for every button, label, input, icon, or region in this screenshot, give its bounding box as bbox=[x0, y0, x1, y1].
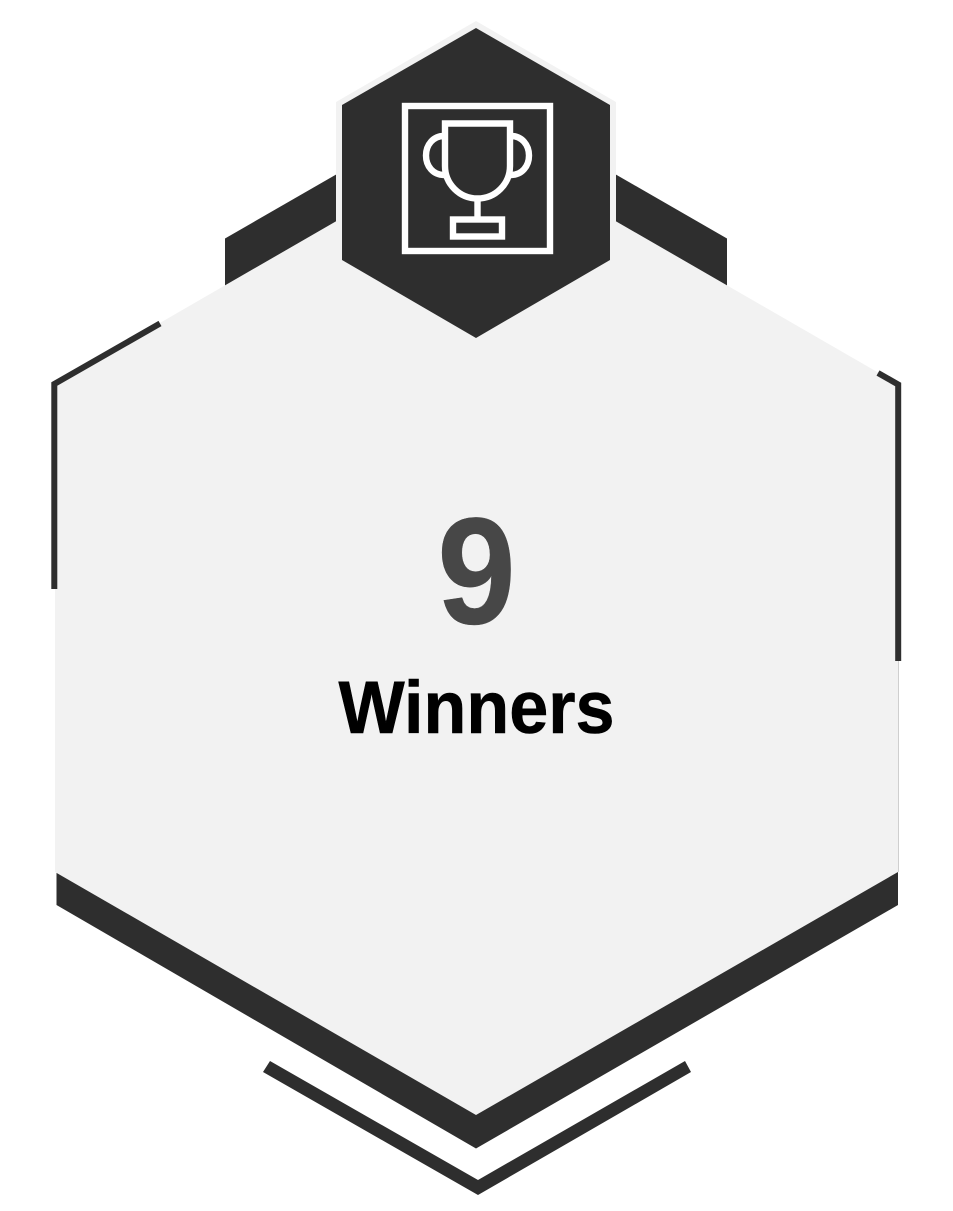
icon hexagon bbox=[342, 28, 610, 338]
trophy cup bbox=[445, 124, 510, 198]
dark back hexagon shoulders bbox=[225, 94, 727, 330]
number: 9 bbox=[437, 487, 516, 657]
thin right edge line bbox=[898, 661, 900, 872]
trophy stem bbox=[474, 201, 481, 217]
dark bottom shadow of main hexagon bbox=[56, 860, 898, 1148]
icon frame bbox=[405, 106, 550, 251]
top-right corner bracket bbox=[878, 373, 898, 661]
left handle bbox=[426, 136, 444, 175]
label: Winners bbox=[338, 667, 615, 749]
icon: trophy in square frame bbox=[405, 106, 550, 251]
bottom chevron bbox=[263, 1061, 691, 1195]
main light hexagon panel bbox=[55, 140, 898, 1115]
icon hexagon border bbox=[336, 21, 616, 345]
trophy base bbox=[453, 220, 502, 236]
right handle bbox=[511, 136, 529, 175]
top-left corner bracket bbox=[54, 324, 160, 589]
